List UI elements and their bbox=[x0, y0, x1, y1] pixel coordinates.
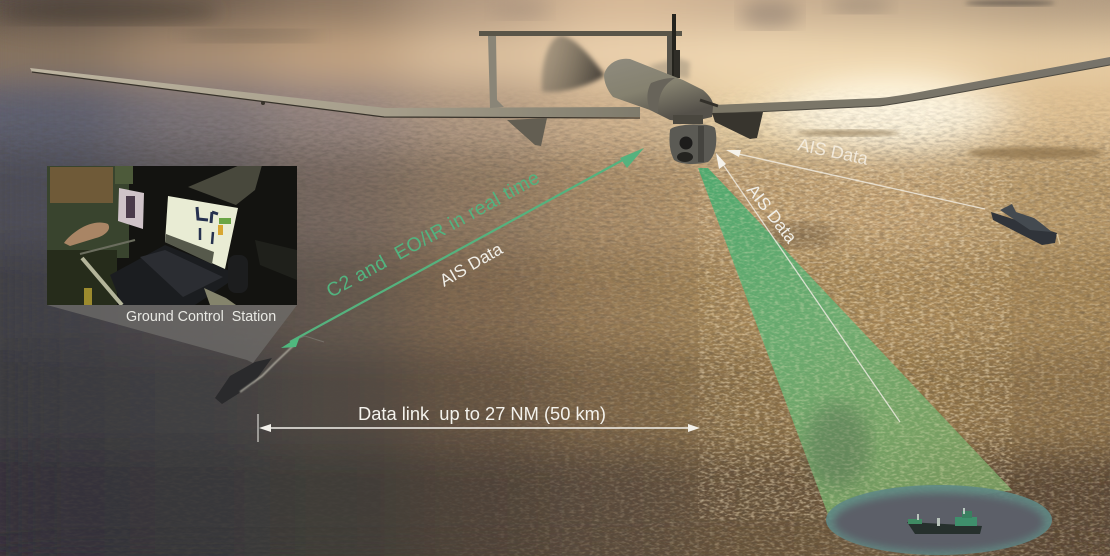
label: AIS Data on green link: AIS Data bbox=[436, 238, 506, 290]
UAV: EO/IR gimbal camera bbox=[669, 115, 716, 164]
label: AIS Data on right link: AIS Data bbox=[796, 134, 870, 169]
arrow: green data link between ship and UAV bbox=[281, 148, 644, 348]
icon: cargo ship in target ellipse bbox=[907, 508, 982, 534]
arrow: white AIS link from target ship bbox=[716, 153, 900, 422]
photo: joystick bbox=[204, 288, 236, 305]
label: Ground Control Station: Ground Control Station bbox=[126, 309, 276, 325]
arrow: data link range bbox=[258, 414, 700, 442]
target detection ellipse bbox=[826, 485, 1052, 555]
UAV: main wing left bbox=[30, 68, 640, 118]
UAV aircraft bbox=[30, 14, 1110, 164]
UAV: main wing right bbox=[712, 57, 1110, 114]
UAV: under-wing fins bbox=[507, 112, 763, 146]
photo: small monitor bbox=[118, 188, 144, 229]
label: data link range: Data link up to 27 NM (50 km) bbox=[358, 403, 606, 424]
UAV: propeller blur bbox=[542, 35, 604, 92]
label: AIS Data on target link: AIS Data bbox=[743, 180, 801, 247]
icon: ground control ship bbox=[47, 305, 324, 404]
photo: keyboard bbox=[140, 250, 223, 297]
arrow: white AIS link from upper right ship bbox=[726, 150, 985, 209]
label: C2 and EO/IR in real time: C2 and EO/IR in real time bbox=[323, 166, 544, 302]
photo: main laptop screen bbox=[165, 196, 238, 269]
UAV: fuselage bbox=[604, 59, 713, 122]
icon: ship, upper right bbox=[991, 204, 1060, 245]
photo: desk rail bbox=[82, 258, 122, 305]
photo: laptop base bbox=[110, 245, 240, 305]
photo: operator hand bbox=[64, 223, 109, 246]
panel: ground control station photo bbox=[47, 165, 297, 305]
UAV: tailplane and tail booms bbox=[479, 14, 682, 108]
sensor beam cone bbox=[698, 168, 1012, 520]
